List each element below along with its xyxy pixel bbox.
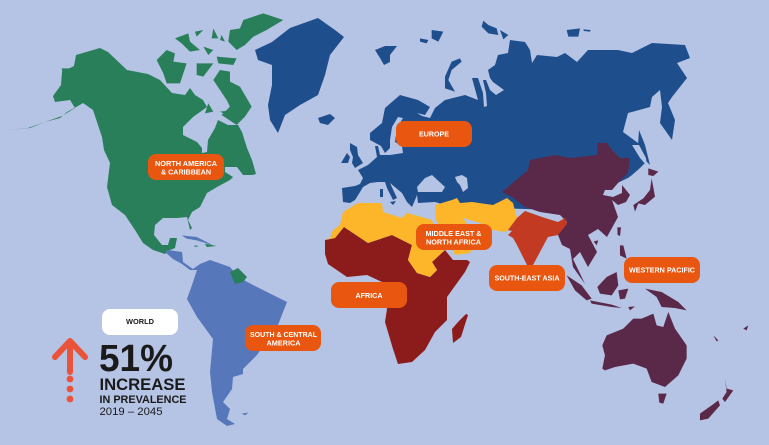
region: Europe and Central Asia bbox=[255, 18, 690, 210]
label: South-East Asia bbox=[489, 265, 565, 291]
Greenland bbox=[255, 18, 344, 133]
region: Western Pacific bbox=[502, 143, 748, 420]
label: Middle East and North Africa bbox=[416, 224, 492, 250]
label: World: WORLD bbox=[126, 317, 155, 326]
label: Europe: EUROPE bbox=[419, 130, 449, 138]
label: Europe bbox=[396, 121, 472, 147]
label: South and Central America bbox=[245, 325, 321, 351]
statistic: world prevalence increase bbox=[99, 338, 186, 418]
statistic: world prevalence increase: 2019 – 2045 bbox=[100, 406, 162, 418]
label: World bbox=[102, 309, 178, 335]
region: South and Central America bbox=[165, 235, 287, 426]
region: South-East Asia bbox=[508, 211, 567, 265]
label: South-East Asia: SOUTH-EAST ASIA bbox=[494, 274, 560, 282]
icon: rising arrow bbox=[55, 341, 85, 402]
statistic: world prevalence increase: INCREASE bbox=[100, 376, 186, 394]
region: Africa bbox=[325, 227, 470, 364]
label: Middle East and North Africa: MIDDLE EAST & bbox=[426, 229, 482, 238]
inland seas bbox=[417, 145, 647, 192]
label: North America and Caribbean: NORTH AMERICA bbox=[155, 159, 218, 168]
Ireland bbox=[341, 153, 350, 163]
label: South and Central America: SOUTH & CENTRAL bbox=[250, 330, 317, 339]
region: North America and Caribbean bbox=[6, 13, 283, 254]
label: Middle East and North Africa: NORTH AFRICA bbox=[426, 238, 482, 246]
statistic: world prevalence increase: 51% bbox=[99, 338, 173, 380]
statistic: world prevalence increase: IN PREVALENCE bbox=[100, 394, 186, 406]
label: Western Pacific bbox=[624, 257, 700, 283]
region: Middle East and North Africa bbox=[325, 198, 517, 277]
label: North America and Caribbean bbox=[148, 154, 224, 180]
label: Africa: AFRICA bbox=[356, 291, 383, 300]
Britain bbox=[350, 143, 363, 168]
label: Africa bbox=[331, 282, 407, 308]
label: Western Pacific: WESTERN PACIFIC bbox=[629, 266, 696, 274]
label: South and Central America: AMERICA bbox=[266, 338, 301, 348]
label: North America and Caribbean: & CARIBBEAN bbox=[161, 168, 211, 176]
